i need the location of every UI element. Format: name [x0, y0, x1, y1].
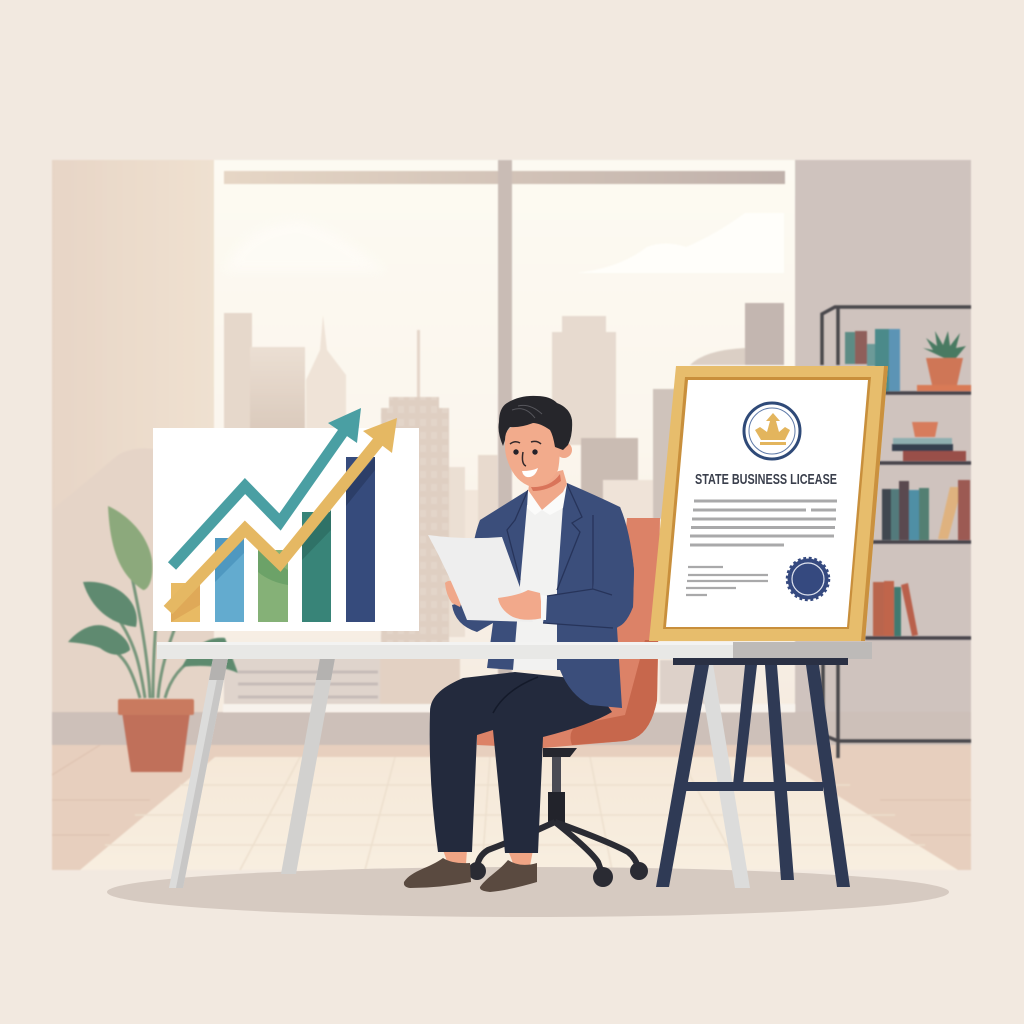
ankles: [443, 850, 533, 866]
potted plant: [68, 506, 238, 772]
ear: [556, 442, 572, 458]
left cloud: [224, 220, 385, 272]
books: third shelf: [882, 480, 970, 540]
bar chart: [171, 457, 375, 622]
floor shadow: [107, 867, 949, 917]
shirt: [513, 505, 563, 670]
table top: [157, 642, 872, 659]
arrow: gold trend: [168, 418, 397, 610]
room background: [52, 160, 971, 870]
window skyline: [224, 213, 784, 705]
shoes: [404, 858, 537, 892]
license title: STATE BUSINESS LICEASE: [695, 472, 837, 488]
hair: [498, 396, 572, 450]
books: lower shelf: [873, 581, 918, 636]
lapels: [507, 484, 593, 590]
eyes and brows: [510, 441, 541, 466]
cuff: [541, 595, 547, 620]
blue seal: [788, 558, 828, 600]
right hand: [498, 590, 543, 620]
paper: [428, 535, 533, 622]
seal emblem: [744, 403, 800, 459]
chair: [468, 518, 660, 887]
easel: [656, 658, 850, 887]
signature lines: [686, 567, 768, 595]
license text lines: [690, 501, 837, 545]
collar: [527, 484, 567, 515]
book stack and bowl: [892, 422, 966, 461]
bookshelf: [822, 307, 971, 758]
neck shadow: [531, 474, 561, 491]
left hand: [445, 581, 467, 607]
face: [505, 420, 560, 487]
person: [404, 396, 634, 892]
framed license: [649, 366, 888, 641]
right sleeve: [543, 507, 634, 628]
trousers: [430, 672, 612, 853]
books: top shelf: [845, 329, 900, 391]
potted succulent: [917, 331, 971, 391]
jacket: [452, 483, 634, 708]
table legs: [169, 658, 750, 888]
arrow: teal trend: [172, 408, 361, 566]
chart board: [153, 408, 419, 631]
window frame: [223, 160, 795, 712]
neck: [528, 470, 567, 510]
thigh line: [493, 677, 538, 713]
sleeve lines: [543, 589, 613, 628]
mouth: [522, 468, 538, 477]
